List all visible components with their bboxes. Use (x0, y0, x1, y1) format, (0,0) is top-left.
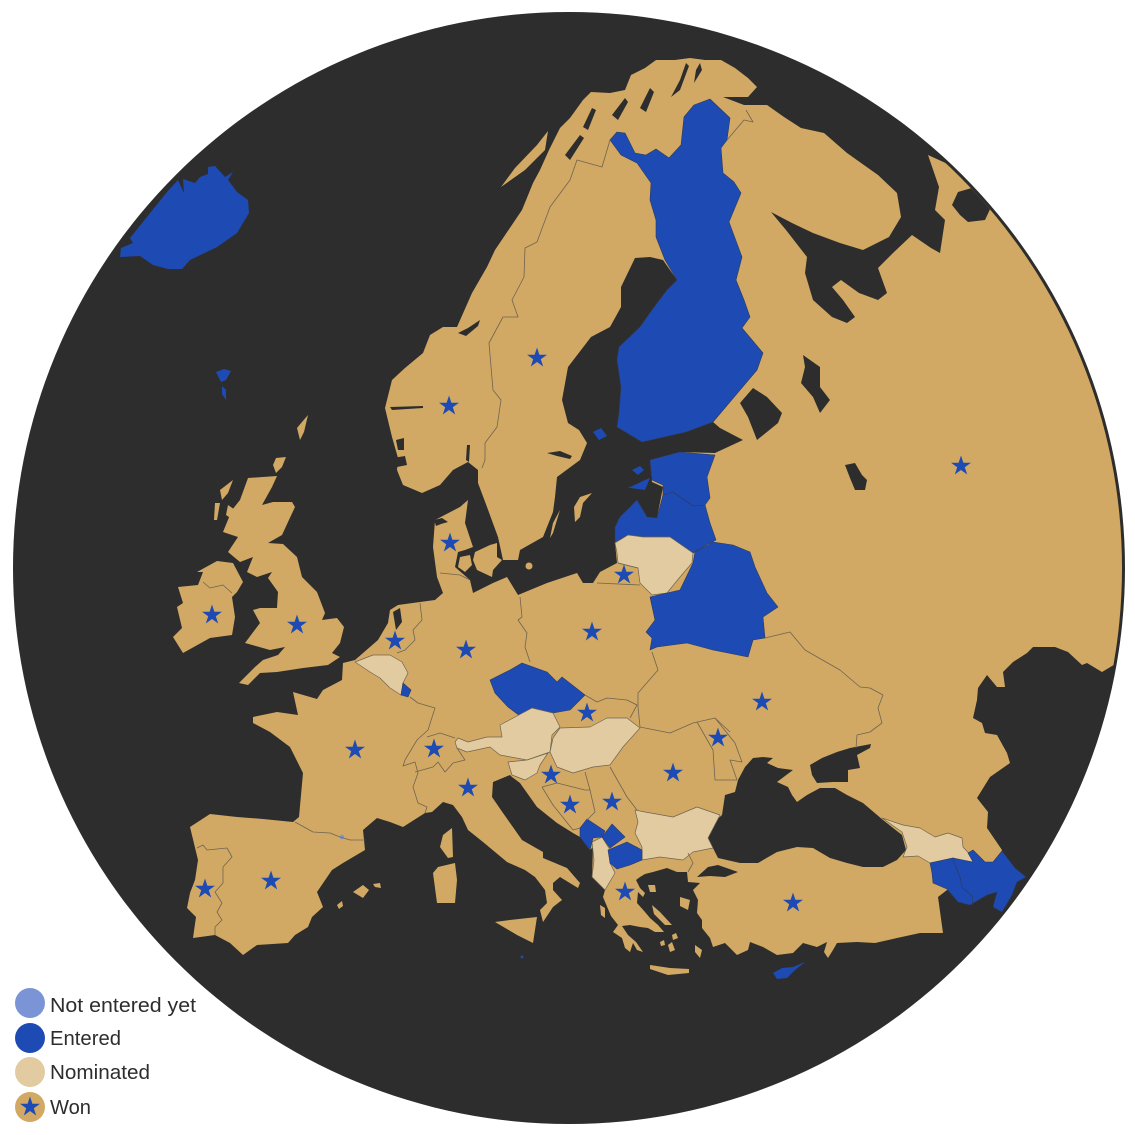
country: Finland (entered) (610, 99, 763, 442)
legend (15, 988, 196, 1122)
island: Sicily (495, 917, 537, 943)
water: Lake Onega (801, 355, 830, 413)
country: Andorra (not entered yet) (340, 835, 344, 839)
star: Poland (582, 622, 602, 640)
star: Ireland (202, 604, 222, 624)
island: Bornholm (526, 562, 532, 570)
water: Black Sea (708, 757, 906, 867)
islands: Saaremaa and Hiiumaa (entered) (628, 466, 650, 490)
islands: Aegean (600, 885, 702, 958)
national borders (197, 110, 883, 935)
star: Sweden (527, 348, 547, 366)
islands: Aland (entered) (593, 428, 607, 440)
country: Austria (nominated) (455, 708, 560, 760)
star: Russia (951, 456, 971, 474)
legend item: nominated (15, 1057, 150, 1087)
legend item: not entered yet: Not entered yet (50, 995, 196, 1017)
island: Sardinia (433, 863, 457, 903)
country: Latvia (entered) (615, 492, 716, 553)
island: Crete (650, 965, 689, 975)
island: Zealand (473, 543, 502, 577)
country: Bulgaria (nominated) (635, 807, 720, 860)
island: Ireland (173, 561, 243, 653)
islands: Faroe (entered) (216, 369, 231, 400)
star: Netherlands (385, 630, 405, 650)
star: Turkey (783, 892, 803, 912)
islands: Balearics (337, 883, 381, 909)
country: Kosovo (entered) (602, 824, 625, 848)
countries: Azerbaijan and Armenia (entered) (930, 850, 1026, 912)
star: United Kingdom (287, 614, 307, 634)
star: Spain (261, 870, 281, 890)
country: Cyprus (entered) (773, 962, 805, 979)
country: Malta (entered) (520, 956, 524, 958)
island: Corsica (440, 828, 453, 858)
star: Croatia (541, 764, 561, 784)
star: Greece (615, 882, 635, 900)
country: Slovenia (nominated) (508, 753, 548, 780)
star: Serbia (602, 792, 622, 810)
legend item: won: Won (50, 1097, 91, 1119)
star: France (345, 740, 365, 758)
country: Czech Republic (entered) (490, 663, 585, 716)
star: Bosnia (560, 794, 580, 814)
country: Macedonia (entered) (608, 842, 642, 869)
star: Germany (456, 640, 476, 658)
water: Swedish lakes and fjords (390, 63, 702, 630)
water: Rybinsk reservoir (845, 463, 867, 490)
star: Slovakia (577, 702, 597, 722)
star: Ukraine (752, 692, 772, 710)
legend item: nominated: Nominated (50, 1062, 150, 1084)
island: Oland (550, 510, 560, 538)
country: Albania (nominated) (592, 837, 615, 890)
country: Iceland (entered) (120, 166, 249, 269)
star: Moldova (708, 728, 728, 746)
star: Italy (458, 778, 478, 796)
star: Portugal (195, 878, 215, 898)
water: Lake Ladoga (740, 388, 782, 440)
star: Romania (663, 762, 683, 782)
legend item: not entered yet (15, 988, 196, 1018)
star: Switzerland (424, 738, 444, 758)
country: Montenegro (entered) (580, 819, 605, 850)
water: Pechora bay (952, 187, 992, 222)
country: Belgium (nominated) (355, 655, 408, 695)
country: Lithuania (nominated) (615, 535, 693, 595)
country: Hungary (nominated) (550, 718, 640, 773)
star: Kaliningrad (614, 564, 634, 584)
landmass: mainland Europe and Russia (187, 58, 1135, 958)
country: Georgia (nominated) (882, 818, 975, 864)
island: Lofoten (501, 131, 548, 187)
country: Belarus (entered) (646, 542, 778, 657)
island: Great Britain (223, 476, 344, 685)
border: Armenia (953, 860, 973, 905)
legend item: entered: Entered (50, 1028, 121, 1050)
legend item: entered (15, 1023, 121, 1053)
island: Gotland (574, 493, 592, 522)
country: Estonia (entered) (650, 452, 715, 506)
legend item: won (15, 1092, 91, 1122)
water: Sea of Marmara (697, 865, 738, 877)
islands: Scottish isles (214, 415, 308, 522)
water: Sea of Azov (810, 744, 871, 783)
star: Norway (439, 396, 459, 414)
star: Denmark (440, 532, 460, 552)
country: Luxembourg (entered) (401, 683, 411, 697)
island: Funen (458, 555, 472, 572)
map of Europe (120, 58, 1135, 979)
